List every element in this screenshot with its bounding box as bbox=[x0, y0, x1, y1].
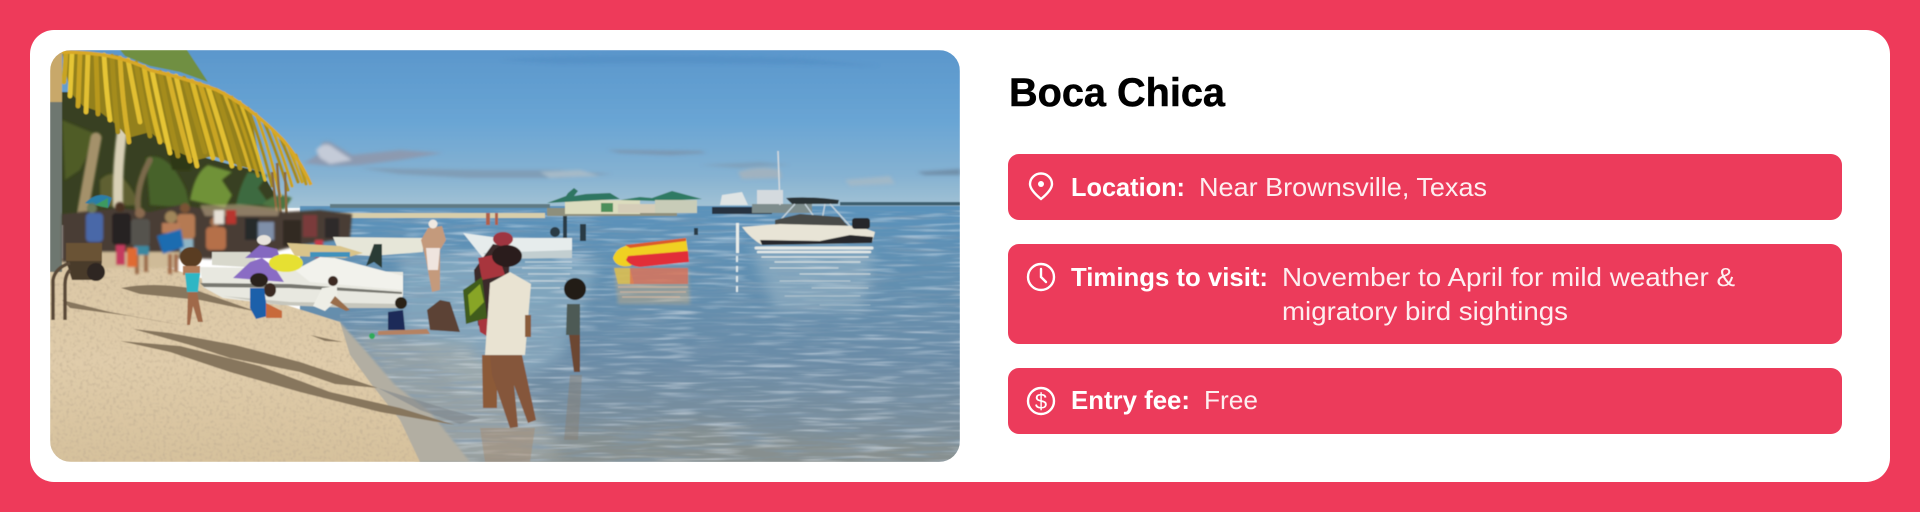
info row: entry fee bbox=[1008, 368, 1842, 434]
light water near the shore and boats bbox=[396, 250, 600, 376]
sky bbox=[50, 50, 960, 208]
distant swimmers bbox=[486, 213, 698, 241]
pedal boat bbox=[200, 267, 403, 308]
far boats and mast bbox=[712, 151, 812, 214]
speedboat bbox=[742, 197, 875, 310]
info row: location bbox=[1008, 154, 1842, 220]
purple umbrellas bbox=[245, 245, 280, 258]
adults in the water bbox=[463, 232, 586, 462]
concrete pole bbox=[50, 50, 62, 102]
woman in white bbox=[492, 245, 522, 267]
sand shadows bbox=[62, 285, 455, 425]
white hat bbox=[257, 235, 271, 245]
sand-side boats bbox=[200, 235, 423, 308]
value: timings: migratory bird sightings bbox=[1282, 296, 1568, 326]
child with afro bbox=[564, 278, 586, 300]
label: location: Location: bbox=[1071, 172, 1185, 202]
water ripple texture bbox=[340, 210, 960, 462]
icon: dollar coin: $ bbox=[1035, 389, 1047, 414]
crowd bbox=[62, 202, 352, 274]
banana boat bbox=[613, 238, 690, 304]
water children bbox=[369, 297, 460, 339]
icon: dollar coin bbox=[1028, 388, 1054, 414]
icon: clock bbox=[1028, 264, 1054, 290]
shirts and people bbox=[86, 202, 339, 274]
chair bbox=[53, 263, 70, 320]
post bbox=[736, 223, 739, 253]
wet sand band bbox=[338, 320, 470, 462]
child on shore bbox=[366, 244, 382, 268]
blue board bbox=[157, 229, 184, 254]
blue and green parasols bbox=[85, 195, 112, 208]
buildings on the pier bbox=[547, 188, 702, 216]
label: timings: Timings to visit: bbox=[1071, 262, 1268, 292]
water bbox=[300, 206, 960, 462]
heading: Boca Chica bbox=[1009, 71, 1226, 115]
white boat behind the family bbox=[463, 233, 572, 258]
far shore and pier bbox=[330, 204, 550, 208]
reflection of white boat bbox=[522, 262, 572, 288]
dark tree mass bbox=[62, 92, 280, 225]
blue shirt child bbox=[250, 273, 268, 287]
info row: timings to visit bbox=[1008, 244, 1842, 344]
palms and foliage behind bbox=[62, 120, 292, 210]
photo: beach scene at Boca Chica bbox=[50, 50, 960, 462]
icon: map pin bbox=[1030, 174, 1052, 199]
value: entry fee: Free bbox=[1204, 385, 1258, 415]
value: timings: November to April for mild weather & bbox=[1282, 262, 1735, 292]
yellow float bbox=[269, 254, 303, 272]
backpack person bbox=[474, 244, 510, 340]
white shirt child bbox=[328, 276, 338, 286]
teal swimsuit girl bbox=[180, 247, 202, 267]
value: location: Near Brownsville, Texas bbox=[1199, 172, 1487, 202]
value: timings bbox=[1282, 262, 1735, 326]
label: entry fee: Entry fee: bbox=[1071, 385, 1190, 415]
sand speckle texture bbox=[50, 270, 406, 461]
big yellow palm frond bbox=[61, 50, 313, 214]
cart bbox=[66, 243, 105, 281]
beach children bbox=[180, 220, 446, 325]
reflections bbox=[564, 375, 582, 440]
sand bbox=[50, 258, 420, 462]
clouds bbox=[303, 55, 960, 186]
standing distant people bbox=[421, 226, 446, 292]
palm trunks bbox=[80, 132, 150, 228]
rear palm (green) bbox=[120, 50, 208, 82]
